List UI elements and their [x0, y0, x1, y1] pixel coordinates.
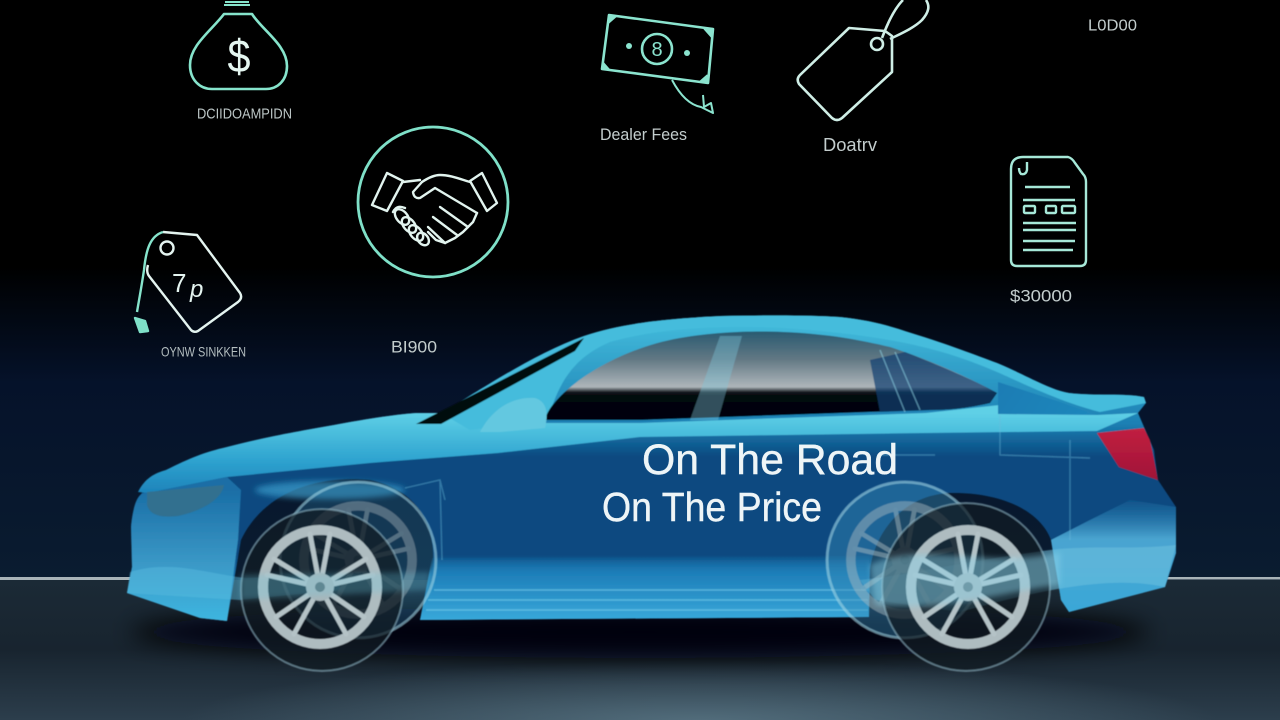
icon: handshake in circle: [358, 127, 508, 277]
mirror: [480, 398, 547, 432]
icon: price tag right: [798, 0, 928, 120]
hood and shoulder highlight: [138, 405, 1138, 493]
icon: price tag left: p: [189, 276, 203, 303]
A pillar and roof band: [441, 315, 1146, 430]
icon: price tag left: 7: [172, 268, 186, 298]
title: On The Road: [642, 436, 898, 484]
label: handshake amount: BI900: [391, 338, 437, 356]
nose: [127, 477, 241, 621]
label: dealer fees: Dealer Fees: [600, 126, 687, 144]
icon: document: [1011, 157, 1086, 266]
title: On The Price: [602, 484, 822, 530]
label: bag: DCIIDOAMPIDN: [197, 106, 292, 122]
glow above front arch: [255, 481, 405, 499]
tail light: [1097, 428, 1158, 480]
label: tag left: OYNW SINKKEN: [161, 344, 246, 360]
rear quarter panel: [998, 382, 1097, 415]
title: [602, 436, 898, 530]
icon: price tag left: [135, 232, 241, 332]
icon: banknote: [602, 15, 713, 113]
rear window tint: [870, 352, 997, 412]
icon: money bag: $: [228, 30, 250, 82]
door outline details: [405, 415, 1090, 560]
label: document amount: $30000: [1010, 286, 1072, 306]
body shell: [127, 315, 1176, 621]
far side ghost wheels: [280, 482, 983, 638]
top right label: L0D00: [1088, 18, 1137, 34]
translucent body sweep over wheels: [240, 552, 1060, 606]
windshield dark strip: [416, 338, 584, 424]
car body: [127, 315, 1176, 621]
front wheel: [241, 509, 403, 671]
rear wheel: [882, 503, 1050, 671]
headlight: [147, 485, 224, 517]
tail swoosh: [1051, 500, 1176, 612]
icon: banknote: 8: [651, 39, 663, 61]
icon: money bag: [190, 2, 287, 89]
side windows: [545, 332, 997, 420]
lower body stripes: [420, 556, 869, 620]
label: tag right: Doatrv: [823, 135, 877, 155]
front bumper swoosh: [127, 567, 340, 600]
car shadow: [130, 606, 1150, 658]
pillars: [690, 336, 742, 420]
